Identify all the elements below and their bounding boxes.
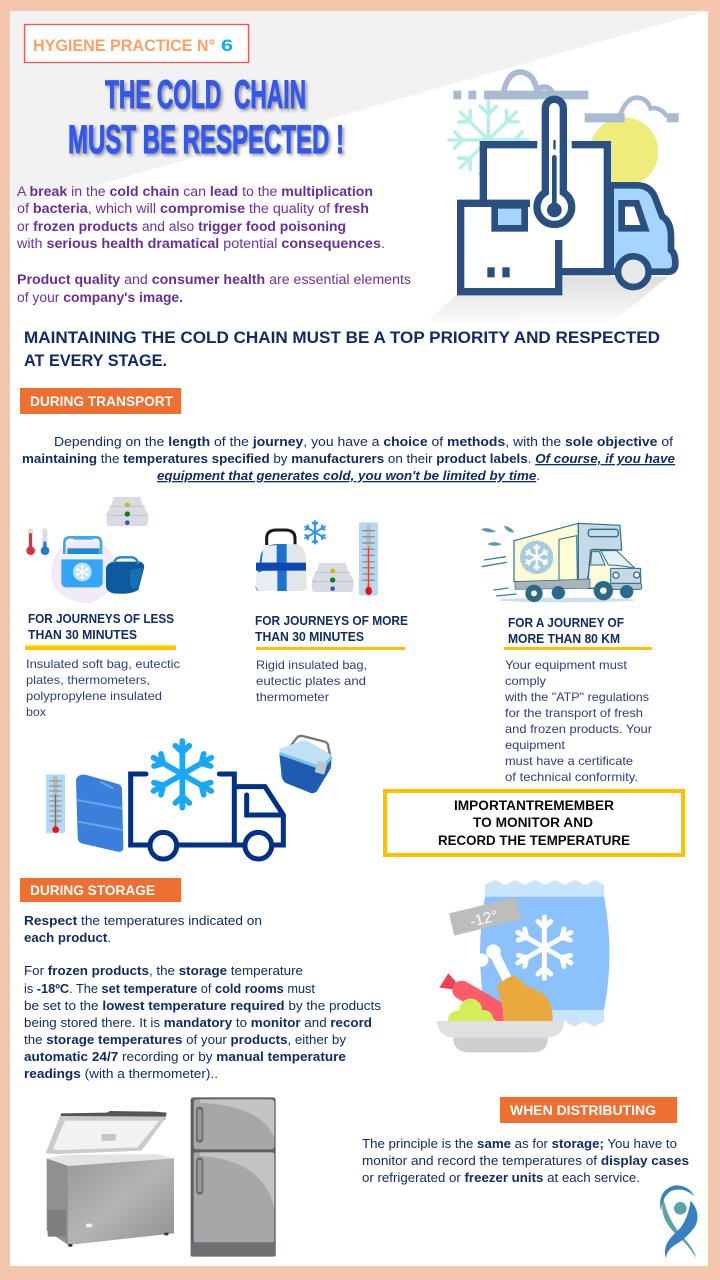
badge: hygiene practice number: HYGIENE PRACTICE N° xyxy=(33,36,215,55)
section label: during transport: DURING TRANSPORT xyxy=(30,394,174,409)
section label: when distributing xyxy=(500,1097,677,1123)
column: journey of more than 80 km xyxy=(504,616,652,784)
column: journeys of more than 30 minutes xyxy=(255,614,408,704)
column: journey of more than 80 km: FOR A JOURNEY OF xyxy=(508,616,624,630)
column: journeys of less than 30 minutes: polypropylene insulated xyxy=(26,689,162,703)
intro text block: with serious health dramatical potential consequences . xyxy=(16,236,385,251)
section label: when distributing: WHEN DISTRIBUTING xyxy=(510,1103,656,1118)
storage text block: being stored there. It is mandatory to monitor and record xyxy=(24,1015,372,1030)
icon: thermometer, cold pack, truck and cooler xyxy=(46,736,332,859)
column: journey of more than 80 km: equipment xyxy=(505,738,566,752)
section label: during transport xyxy=(20,388,181,414)
column: journey of more than 80 km: for the transport of fresh xyxy=(505,706,643,720)
callout: important reminder: TO MONITOR AND xyxy=(473,815,593,830)
column: journey of more than 80 km: and frozen products. Your xyxy=(505,722,652,736)
icon: refrigerated delivery truck xyxy=(481,523,642,602)
transport intro text xyxy=(22,434,675,483)
intro text block: of bacteria, which will compromise the quality of fresh xyxy=(17,201,369,216)
icon: truck, box and thermometer xyxy=(420,72,679,327)
column: journey of more than 80 km: Your equipment must xyxy=(505,658,628,672)
callout: important reminder: IMPORTANTREMEMBER xyxy=(454,798,614,813)
intro text block: A break in the cold chain can lead to the multiplication xyxy=(17,184,373,199)
icon: rigid bag, plates, snowflake, thermometer xyxy=(256,521,378,595)
intro text block: of your company's image. xyxy=(17,290,183,305)
title: MUST BE RESPECTED ! xyxy=(68,118,344,162)
icon: logo ribbon xyxy=(660,1185,698,1258)
section label: during storage: DURING STORAGE xyxy=(30,883,155,898)
badge: hygiene practice number xyxy=(24,24,248,62)
storage text block xyxy=(24,913,382,1081)
storage text block: readings (with a thermometer).. xyxy=(24,1066,218,1081)
callout: important reminder xyxy=(385,791,683,855)
column: journeys of less than 30 minutes: Insulated soft bag, eutectic xyxy=(26,657,180,671)
title: THE COLD CHAIN xyxy=(105,73,306,117)
column: journey of more than 80 km: with the "ATP" regulations xyxy=(504,690,649,704)
icon: soft bag, cooler, plates, thermometers xyxy=(26,497,148,603)
distribution text block: The principle is the same as for storage; You have to xyxy=(362,1136,677,1151)
column: journeys of more than 30 minutes: thermometer xyxy=(256,690,329,704)
intro text block: or frozen products and also trigger food poisoning xyxy=(17,219,346,234)
distribution text block xyxy=(362,1136,689,1185)
storage text block: be set to the lowest temperature required by the products xyxy=(24,998,382,1013)
icon: frozen food bag and plate xyxy=(433,880,609,1057)
icon: chest freezer and fridge xyxy=(46,1097,276,1257)
callout: important reminder: RECORD THE TEMPERATURE xyxy=(438,833,630,848)
storage text block: the storage temperatures of your products, either by xyxy=(24,1032,347,1047)
column: journeys of less than 30 minutes xyxy=(25,612,180,719)
storage text block: each product. xyxy=(24,930,111,945)
intro text block: Product quality and consumer health are essential elements xyxy=(17,272,411,287)
heading: top priority: AT EVERY STAGE. xyxy=(24,352,167,370)
title xyxy=(68,73,344,162)
storage text block: Respect the temperatures indicated on xyxy=(24,913,262,928)
column: journeys of more than 30 minutes: THAN 30 MINUTES xyxy=(255,630,364,644)
column: journeys of more than 30 minutes: eutectic plates and xyxy=(256,674,366,688)
heading: top priority xyxy=(24,329,660,370)
transport intro text: maintaining the temperatures specified by manufacturers on their product labels. Of course, if you have xyxy=(22,451,675,466)
distribution text block: monitor and record the temperatures of display cases xyxy=(362,1153,689,1168)
column: journeys of less than 30 minutes: THAN 30 MINUTES xyxy=(28,628,137,642)
icon: frozen food bag and plate: -12° xyxy=(468,907,500,931)
transport intro text: Depending on the length of the journey , you have a choice of methods , with the sole objective of xyxy=(54,434,673,449)
column: journey of more than 80 km: MORE THAN 80 KM xyxy=(508,632,620,646)
distribution text block: or refrigerated or freezer units at each service. xyxy=(362,1170,640,1185)
column: journeys of more than 30 minutes: Rigid insulated bag, xyxy=(256,658,367,672)
column: journeys of less than 30 minutes: box xyxy=(26,705,46,719)
section label: during storage xyxy=(20,878,181,902)
storage text block: For frozen products, the storage temperature xyxy=(24,963,303,978)
column: journey of more than 80 km: of technical conformity. xyxy=(505,770,638,784)
heading: top priority: MAINTAINING THE COLD CHAIN MUST BE A TOP PRIORITY AND RESPECTED xyxy=(24,329,660,347)
intro text block xyxy=(16,184,411,305)
storage text block: automatic 24/7 recording or by manual temperature xyxy=(24,1049,346,1064)
column: journeys of more than 30 minutes: FOR JOURNEYS OF MORE xyxy=(255,614,408,628)
column: journeys of less than 30 minutes: FOR JOURNEYS OF LESS xyxy=(28,612,174,626)
column: journey of more than 80 km: must have a certificate xyxy=(505,754,633,768)
storage text block: is -18ºC. The set temperature of cold rooms must xyxy=(24,981,315,996)
column: journeys of less than 30 minutes: plates, thermometers, xyxy=(26,673,150,687)
transport intro text: equipment that generates cold, you won't be limited by time . xyxy=(157,468,540,483)
badge: hygiene practice number: 6 xyxy=(221,36,233,55)
column: journey of more than 80 km: comply xyxy=(505,674,546,688)
